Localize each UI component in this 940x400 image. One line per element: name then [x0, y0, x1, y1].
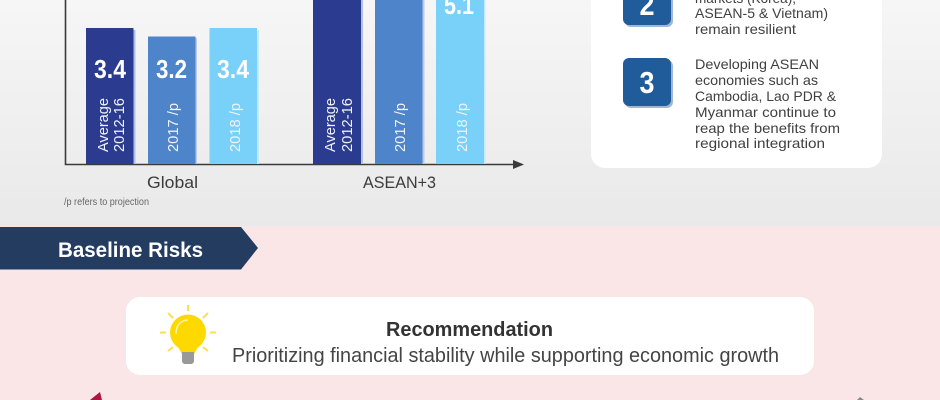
- callout: recommendation: [126, 297, 814, 375]
- heading banner: Baseline Risks: [0, 227, 258, 270]
- recommendation title: Recommendation: [386, 319, 553, 341]
- bar: Global 2017 projection: 2017 /p: [165, 103, 182, 152]
- bar: Global 2018 projection: 2018 /p: [227, 103, 244, 152]
- text: point 3: Developing ASEAN: [695, 56, 819, 72]
- text: point 2: remain resilient: [695, 21, 796, 37]
- panel: key points: [591, 0, 882, 168]
- bar chart: GDP growth: [64, 0, 524, 208]
- badge: number 2: [623, 0, 673, 27]
- icon: grey arrow tip: [857, 397, 864, 400]
- text: point 3: [695, 56, 840, 151]
- bar: Global 2018 projection: [210, 28, 259, 164]
- text: point 3: economies such as: [695, 72, 818, 88]
- panel: baseline risks background: [0, 226, 940, 400]
- text: point 3: Cambodia, Lao PDR &: [695, 88, 837, 104]
- axis label: ASEAN+3: ASEAN+3: [363, 173, 436, 192]
- bar: Global average 2012-16: 2012-16: [111, 98, 128, 152]
- text: point 3: reap the benefits from: [695, 120, 840, 136]
- recommendation text: Prioritizing financial stability while supporting economic growth: [232, 344, 779, 367]
- bar: Global average 2012-16: Average: [95, 98, 112, 152]
- badge: number 3: [623, 58, 673, 108]
- panel: growth background: [0, 0, 940, 227]
- text: point 2: [695, 0, 828, 37]
- bar: Global 2017 projection: 3.2: [156, 54, 187, 84]
- badge: number 3: 3: [640, 65, 654, 100]
- bar: Global average 2012-16: [86, 28, 136, 164]
- bar: ASEAN+3 average 2012-16: 2012-16: [339, 98, 356, 152]
- text: point 3: Myanmar continue to: [695, 104, 836, 120]
- bar group: ASEAN+3: [313, 0, 486, 164]
- icon: light bulb: [160, 305, 216, 364]
- chart axes: [66, 0, 524, 169]
- bar: ASEAN+3 average 2012-16: [313, 0, 363, 164]
- bar: ASEAN+3 2017 projection: [375, 0, 424, 164]
- bar: ASEAN+3 2018 projection: 2018 /p: [454, 103, 471, 152]
- icon: red arrow tip: [90, 392, 102, 400]
- bar: Global average 2012-16: 3.4: [94, 54, 126, 84]
- text: point 2: ASEAN-5 & Vietnam): [695, 5, 828, 21]
- bar: Global 2017 projection: [148, 36, 197, 164]
- bar group: Global: [86, 28, 259, 164]
- bar: ASEAN+3 2018 projection: [436, 0, 486, 164]
- bar: ASEAN+3 2017 projection: 2017 /p: [392, 103, 409, 152]
- axis label: Global: Global: [147, 173, 198, 192]
- footnote: /p refers to projection: [64, 197, 149, 208]
- bar: ASEAN+3 average 2012-16: Average: [322, 98, 339, 152]
- heading banner: Baseline Risks: Baseline Risks: [58, 239, 203, 262]
- text: point 3: regional integration: [695, 135, 825, 151]
- bar: Global 2018 projection: 3.4: [217, 54, 249, 84]
